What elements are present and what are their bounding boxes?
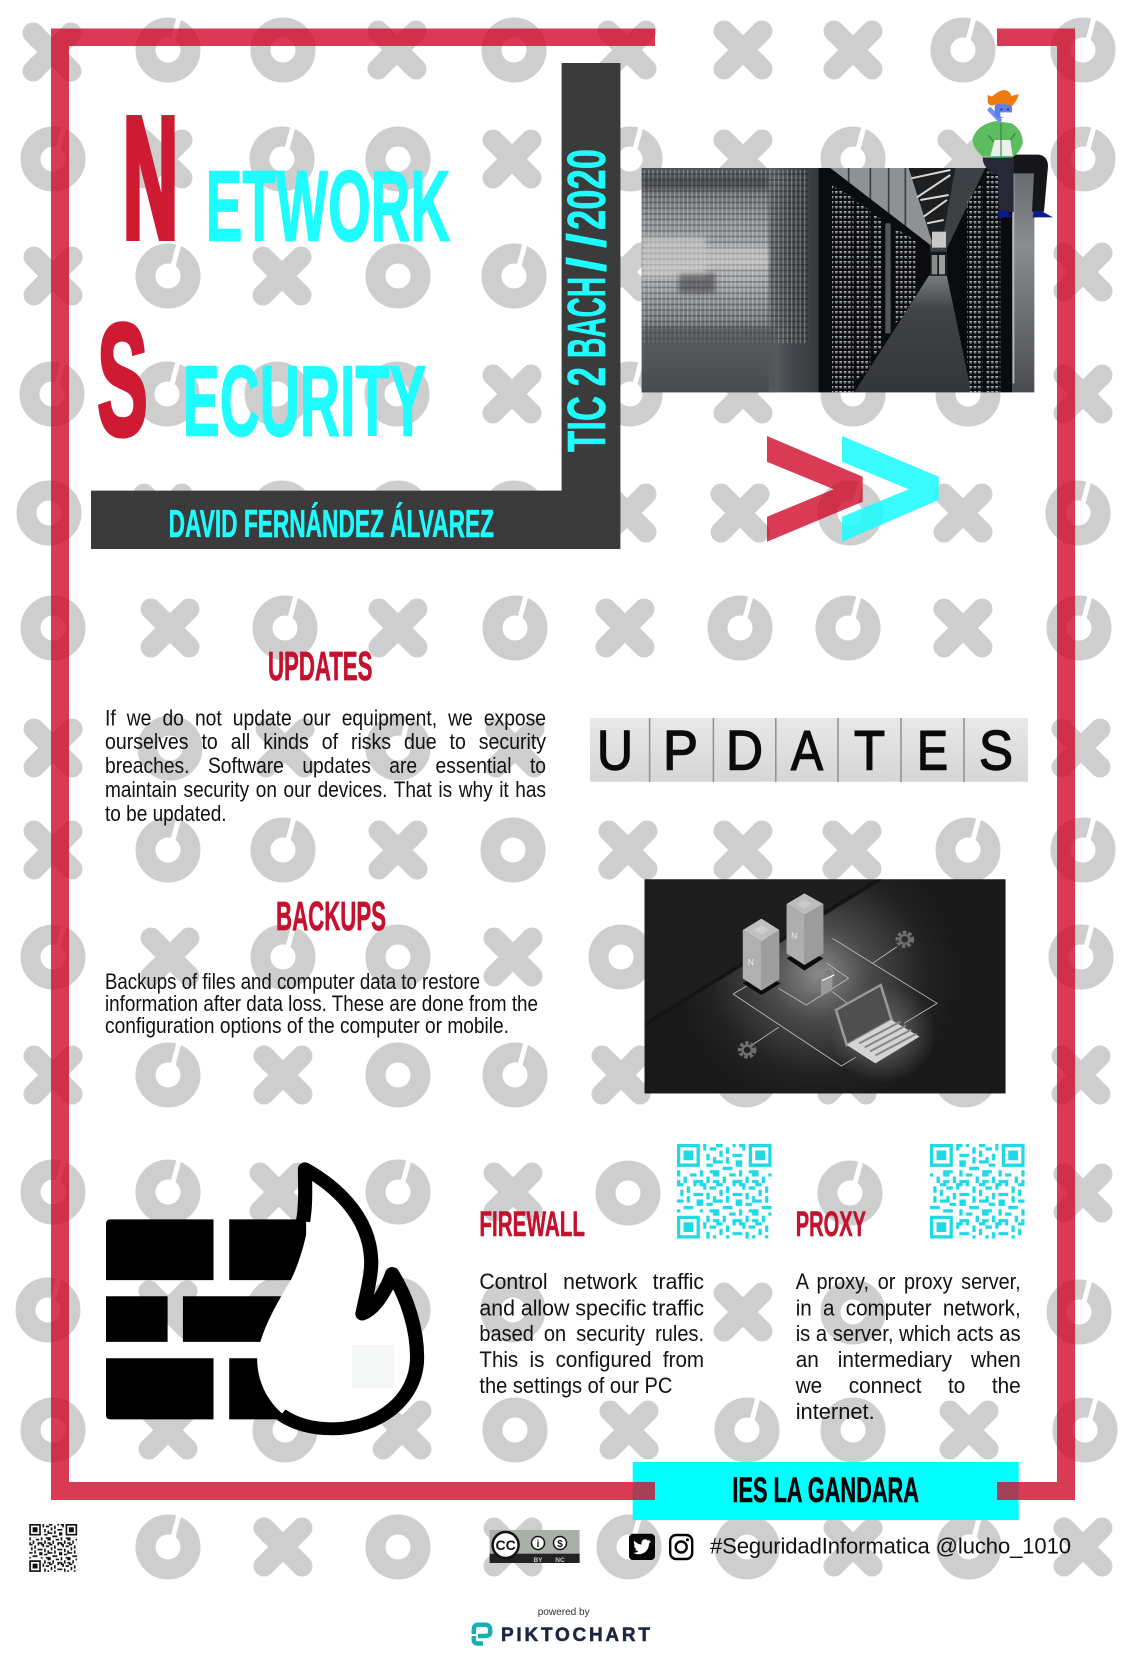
illustration: person sitting on photo	[973, 90, 1053, 217]
title: N	[123, 83, 178, 274]
text block: updates	[105, 705, 546, 826]
class label vertical text: BACH	[557, 277, 617, 358]
QR code: proxy	[930, 1144, 1025, 1239]
text block: proxy: internet.	[796, 1399, 875, 1424]
title: ECURITY	[183, 345, 426, 457]
icon: server tower left	[743, 919, 780, 995]
dark L-shaped banner	[91, 63, 620, 549]
image: updates letter tiles: S	[979, 718, 1013, 782]
text block: updates: maintain security on our devices. That is why it has	[105, 777, 546, 802]
heading: firewall: FIREWALL	[479, 1204, 585, 1244]
powered by label: powered by	[538, 1606, 590, 1618]
band: IES La Gandara	[633, 1462, 1019, 1520]
class label vertical text: TIC 2	[557, 367, 617, 452]
icon: creative commons badge: i	[537, 1539, 540, 1550]
icon: creative commons badge: NC	[555, 1557, 565, 1564]
class label vertical text: //	[557, 233, 617, 272]
text block: updates: to be updated.	[105, 801, 227, 826]
text block: proxy: an intermediary when	[796, 1347, 1021, 1372]
text block: firewall: Control network traffic	[479, 1269, 704, 1294]
text block: firewall: This is configured from	[479, 1347, 704, 1372]
text block: proxy: in a computer network,	[796, 1295, 1021, 1320]
title	[97, 83, 450, 469]
icon: server tower left: N	[748, 957, 754, 967]
text block: firewall	[479, 1269, 704, 1398]
heading: proxy: PROXY	[796, 1204, 866, 1244]
image: updates letter tiles: U	[597, 718, 633, 782]
social handles: #SeguridadInformatica @lucho_1010	[710, 1534, 1071, 1559]
icon: instagram	[670, 1535, 692, 1559]
icon: gears	[740, 933, 912, 1056]
text block: updates: ourselves to all kinds of risks due to security	[105, 729, 546, 754]
heading: backups: BACKUPS	[276, 893, 386, 939]
icon: laptop	[836, 985, 919, 1063]
image: updates letter tiles: E	[917, 718, 948, 782]
chevron arrows	[767, 436, 939, 542]
icon: server tower right: N	[791, 931, 797, 940]
QR code: firewall	[677, 1144, 772, 1239]
image: isometric servers and laptop	[645, 879, 1006, 1093]
band: IES La Gandara: IES LA GANDARA	[732, 1470, 919, 1510]
photo: data center corridor	[642, 90, 1053, 392]
author name: DAVID FERNÁNDEZ ÁLVAREZ	[169, 502, 494, 546]
text block: backups: configuration options of the computer or mobile.	[105, 1013, 509, 1038]
icon: twitter	[629, 1534, 655, 1560]
icon: padlock	[821, 968, 834, 997]
frame overlap on cyan band	[633, 1482, 1019, 1500]
icon: creative commons badge: BY	[533, 1557, 543, 1564]
QR code: footer	[29, 1524, 77, 1572]
image: updates letter tiles: D	[726, 718, 763, 782]
text block: proxy: A proxy, or proxy server,	[796, 1269, 1021, 1294]
text block: backups: Backups of files and computer data to restore	[105, 969, 480, 994]
image: updates letter tiles: T	[854, 718, 885, 782]
icon: creative commons badge: CC	[495, 1537, 516, 1553]
text block: proxy: we connect to the	[795, 1373, 1021, 1398]
heading: updates: UPDATES	[268, 643, 372, 689]
text block: firewall: based on security rules.	[479, 1321, 704, 1346]
text block: proxy: is a server, which acts as	[796, 1321, 1021, 1346]
text block: updates: If we do not update our equipment, we expose	[105, 705, 546, 730]
text block: firewall: the settings of our PC	[479, 1373, 672, 1398]
text block: backups: information after data loss. These are done from the	[105, 991, 538, 1016]
class label vertical text	[557, 149, 617, 452]
icon: creative commons badge: $	[557, 1539, 563, 1550]
icon: server tower right	[787, 893, 823, 971]
text block: firewall: and allow specific traffic	[479, 1295, 704, 1320]
text block: proxy	[795, 1269, 1021, 1424]
Piktochart logo: PIKTOCHART	[501, 1625, 650, 1646]
class label vertical text: 2020	[557, 149, 617, 230]
text block: backups	[105, 969, 538, 1038]
text block: updates: breaches. Software updates are essential to	[105, 753, 546, 778]
icon: creative commons badge	[490, 1530, 580, 1564]
icon: firewall brick wall with flame	[106, 1169, 417, 1429]
image: updates letter tiles	[590, 718, 1028, 782]
title: ETWORK	[206, 150, 450, 262]
image: updates letter tiles: P	[663, 718, 698, 782]
image: updates letter tiles: A	[791, 718, 824, 782]
title: S	[97, 290, 148, 469]
